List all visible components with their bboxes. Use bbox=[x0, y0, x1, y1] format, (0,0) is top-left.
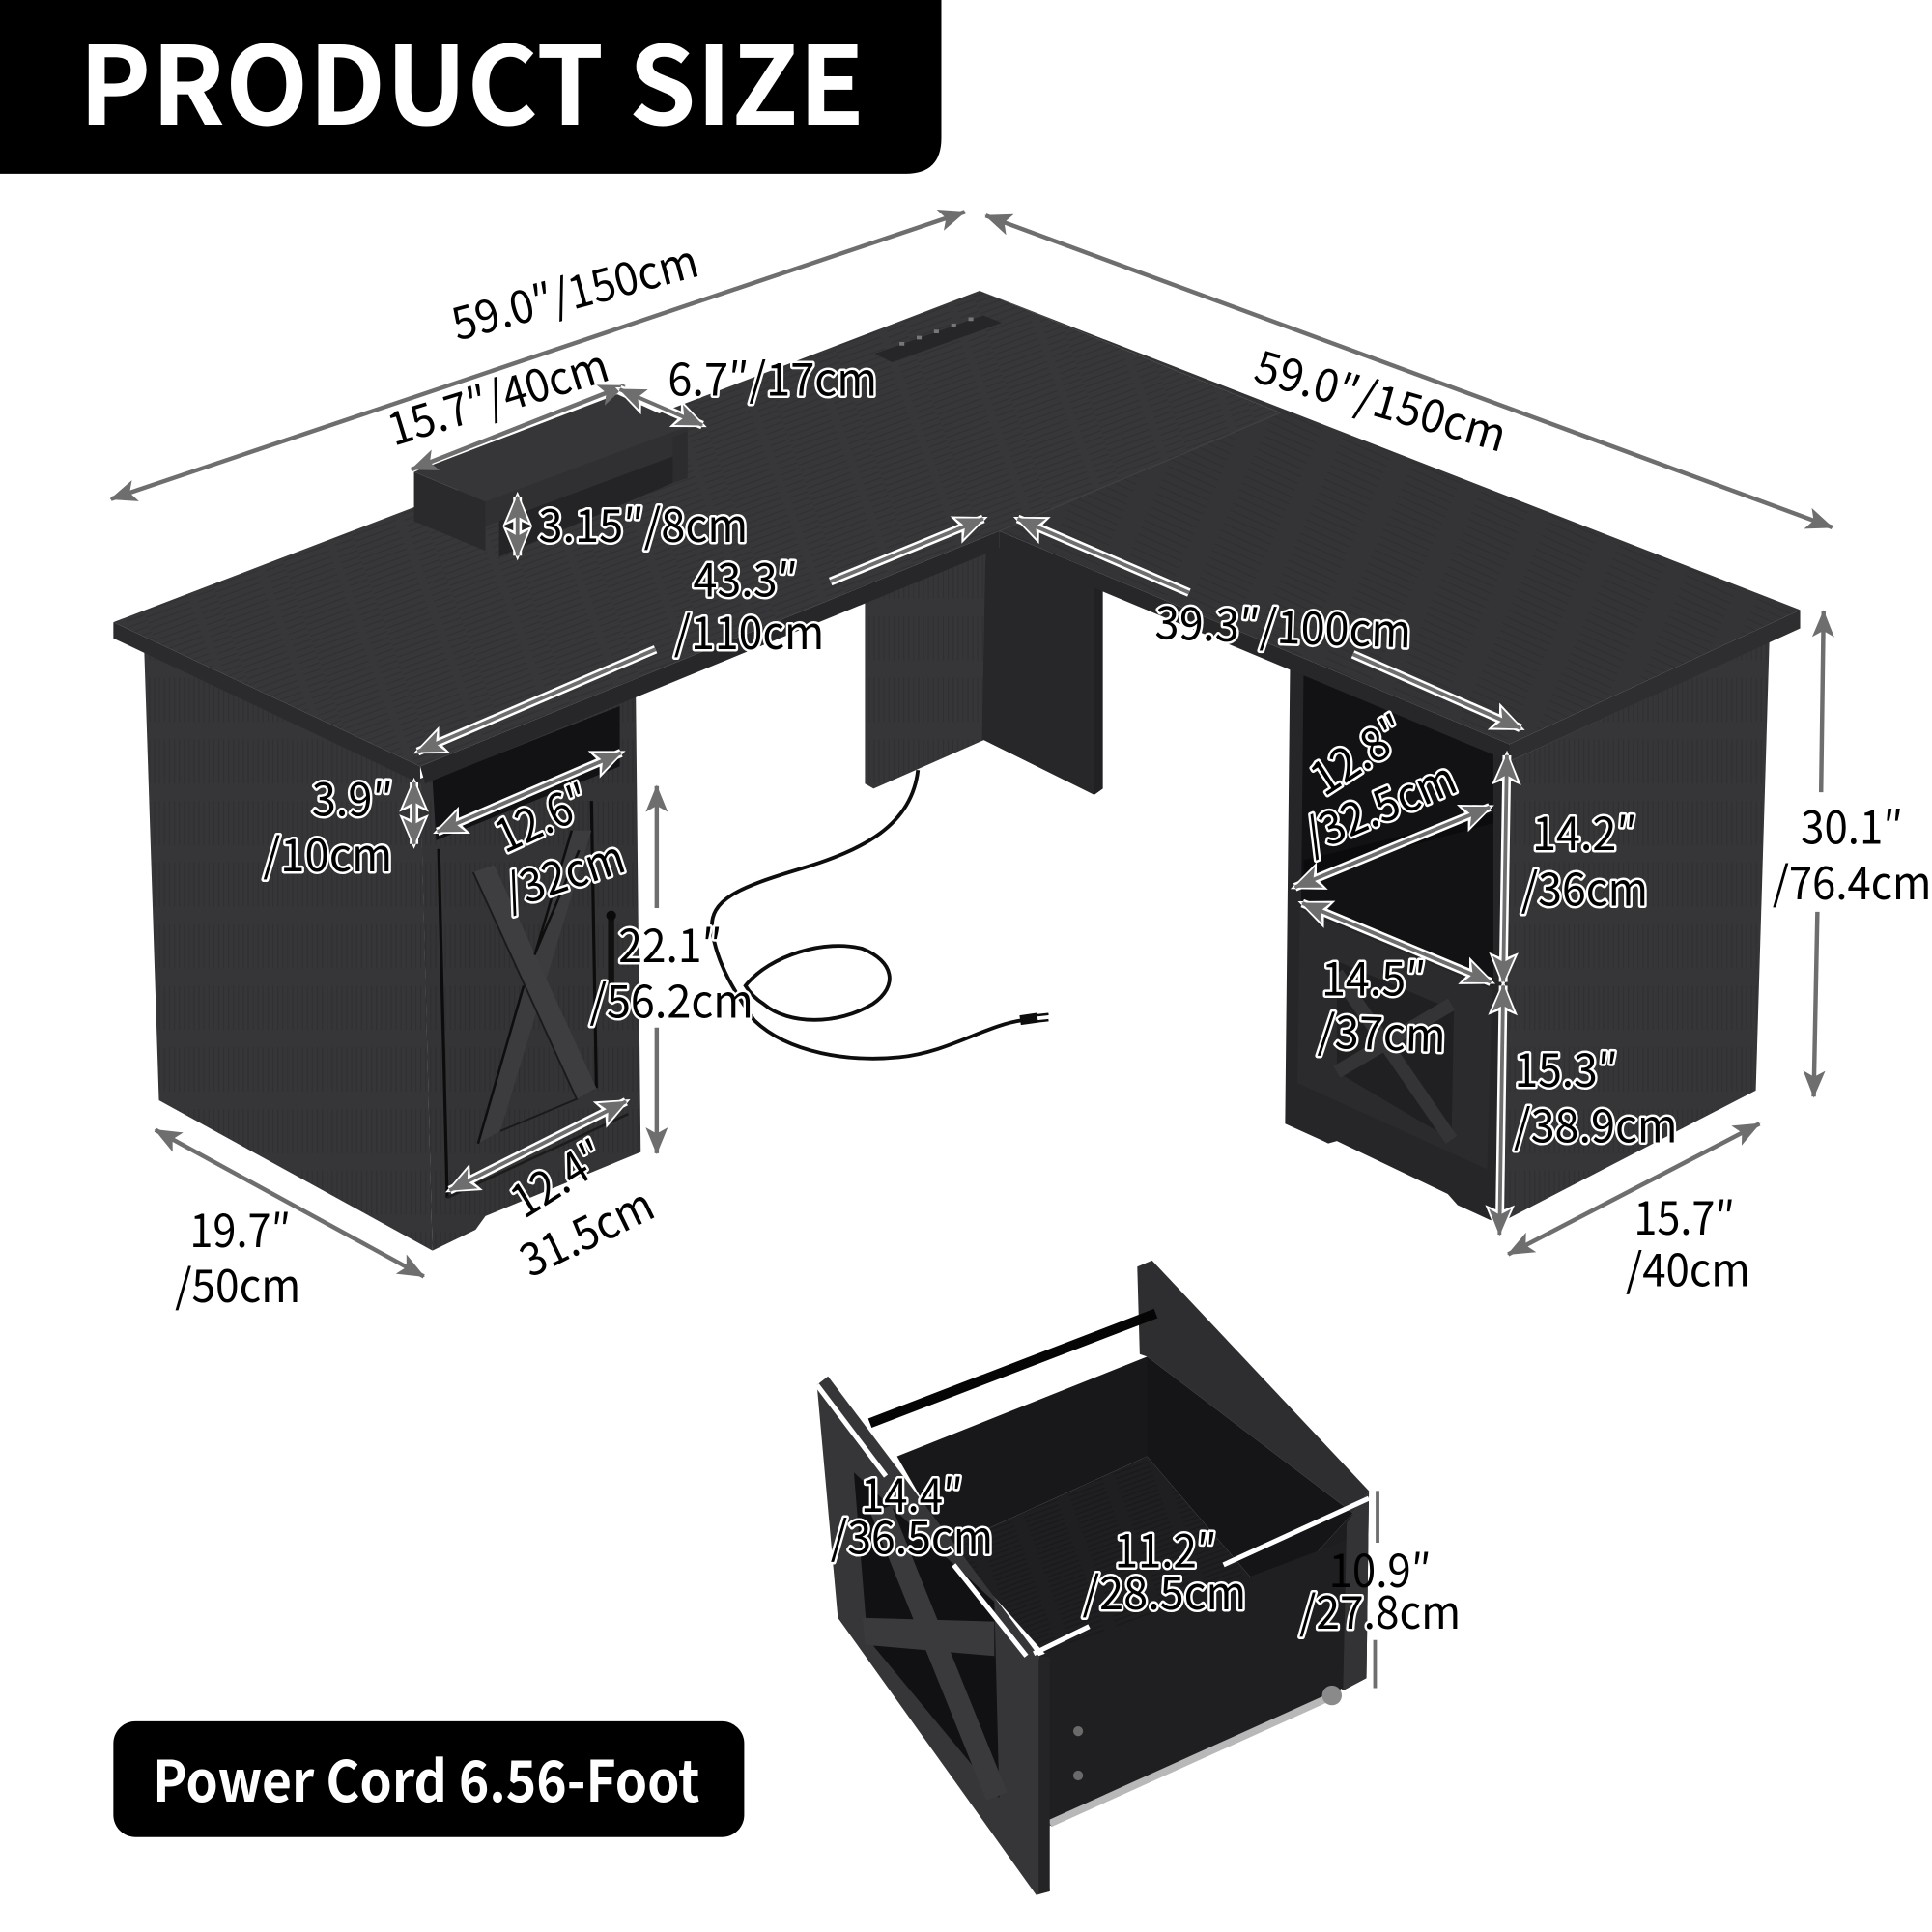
label: door width: 12.4″ bbox=[496, 1121, 617, 1231]
dimensions: overall bbox=[111, 212, 1833, 527]
dimensions: left cabinet bbox=[156, 753, 753, 1316]
lower door bbox=[1297, 909, 1492, 1169]
line: drawer depth bbox=[817, 1385, 1026, 1656]
plug bbox=[1020, 1018, 1037, 1020]
file drawer bbox=[817, 1261, 1369, 1895]
label: cubby width: /32cm bbox=[495, 820, 632, 922]
label: shelf width: /32.5cm bbox=[1292, 742, 1465, 866]
arrow: back right width bbox=[985, 215, 1833, 527]
label: riser depth: 6.7″/17cm bbox=[668, 342, 877, 409]
label: cubby height: 3.9″ bbox=[312, 762, 393, 829]
label: right depth bbox=[1626, 1181, 1750, 1300]
label: left depth: /50cm bbox=[175, 1249, 300, 1316]
label: drawer depth: 14.4″ bbox=[861, 1459, 963, 1525]
dimensions: monitor riser bbox=[378, 328, 877, 555]
label: left inner length: /110cm bbox=[674, 596, 824, 663]
label: riser length: 15.7″/40cm bbox=[378, 328, 615, 459]
arrow: lower door height bbox=[1499, 985, 1503, 1235]
arrow: cubby height bbox=[411, 782, 417, 844]
right drawer wall bbox=[1038, 1491, 1369, 1826]
label: upper shelf height bbox=[1521, 797, 1648, 920]
label: drawer width: 11.2″ bbox=[1115, 1514, 1217, 1580]
callout: power cord length bbox=[113, 1721, 744, 1837]
callout text: Power Cord 6.56-Foot bbox=[153, 1736, 699, 1818]
label: door width bbox=[496, 1121, 664, 1291]
label: shelf width: 12.8″ bbox=[1295, 696, 1418, 809]
drawer interior bbox=[897, 1356, 1369, 1690]
left cabinet front bbox=[420, 693, 640, 1251]
hanging rail bbox=[870, 1314, 1155, 1423]
arrow: left inner length bbox=[417, 519, 983, 752]
label: overall height bbox=[1773, 791, 1931, 913]
arrow: overall height bbox=[1814, 611, 1824, 1096]
label: drawer height bbox=[1299, 1534, 1461, 1642]
desktop thickness bbox=[113, 531, 1801, 783]
label: left inner length: 43.3″ bbox=[693, 543, 798, 610]
label: drawer height: /27.8cm bbox=[1299, 1576, 1461, 1642]
arrow: cubby width bbox=[438, 753, 621, 832]
title banner bbox=[0, 0, 941, 174]
dimensions: right cabinet bbox=[1292, 611, 1931, 1300]
label: drawer width: /28.5cm bbox=[1083, 1556, 1246, 1623]
label: drawer width bbox=[1083, 1514, 1246, 1623]
arrow: riser depth bbox=[620, 389, 702, 425]
label: door width: 31.5cm bbox=[507, 1168, 664, 1291]
slide roller bbox=[1322, 1686, 1342, 1705]
open cubby bbox=[433, 706, 620, 840]
label: right depth: 15.7″ bbox=[1634, 1181, 1735, 1248]
label: cubby height: /10cm bbox=[263, 818, 392, 885]
label: cubby width: 12.6″ bbox=[482, 764, 600, 866]
label: overall height: 30.1″ bbox=[1801, 791, 1903, 858]
label: door height: /56.2cm bbox=[589, 965, 753, 1032]
arrow: right inner length bbox=[1018, 519, 1520, 728]
label: right depth: /40cm bbox=[1626, 1234, 1750, 1300]
door handle bbox=[607, 911, 616, 983]
arrow: door height bbox=[655, 786, 659, 1153]
dimensions: drawer bbox=[817, 1385, 1461, 1688]
arrow: riser height bbox=[514, 497, 521, 555]
screws bbox=[1073, 1726, 1083, 1780]
label: lower door height: 15.3″ bbox=[1515, 1034, 1618, 1100]
label: drawer height: 10.9″ bbox=[1329, 1534, 1432, 1601]
label: riser height: 3.15″/8cm bbox=[538, 489, 748, 555]
line: drawer width bbox=[1034, 1498, 1369, 1654]
label: shelf depth: 14.5″ bbox=[1321, 943, 1426, 1009]
arrow: door width bbox=[450, 1101, 626, 1190]
label: cubby height bbox=[263, 762, 393, 885]
line: drawer height bbox=[1375, 1491, 1378, 1688]
L-shaped desk bbox=[113, 291, 1801, 1251]
title: PRODUCT SIZE bbox=[79, 0, 865, 156]
label: back left width: 59.0″/150cm bbox=[443, 224, 704, 354]
barn drawer front bbox=[817, 1377, 1050, 1895]
label: drawer depth bbox=[831, 1459, 993, 1567]
label: left depth: 19.7″ bbox=[189, 1194, 291, 1261]
label: back right width: 59.0″/150cm bbox=[1248, 329, 1516, 465]
label: left depth bbox=[175, 1194, 300, 1316]
desktop surface bbox=[113, 291, 1801, 766]
arrow: shelf depth bbox=[1302, 903, 1491, 982]
barn door bbox=[439, 773, 631, 1198]
monitor riser bbox=[414, 394, 688, 557]
label: lower door height: /38.9cm bbox=[1514, 1089, 1678, 1155]
label: upper shelf height: 14.2″ bbox=[1532, 797, 1637, 864]
arrow: right depth bbox=[1508, 1123, 1759, 1254]
arrow: riser length bbox=[412, 385, 625, 469]
label: lower door height bbox=[1514, 1034, 1678, 1155]
label: upper shelf height: /36cm bbox=[1521, 853, 1648, 920]
power cord bbox=[712, 770, 1048, 1059]
back panel bbox=[1137, 1261, 1369, 1513]
right cabinet front bbox=[1285, 666, 1509, 1222]
right cabinet side bbox=[1499, 642, 1770, 1222]
arrow: back left width bbox=[111, 212, 965, 499]
arrow: shelf width bbox=[1295, 807, 1490, 887]
label: shelf depth bbox=[1317, 943, 1447, 1065]
open shelves bbox=[1301, 671, 1493, 985]
label: cubby width bbox=[482, 764, 632, 922]
power strip bbox=[875, 316, 1002, 362]
drawer slide bbox=[1050, 1698, 1328, 1824]
label: right inner length: 39.3″/100cm bbox=[1154, 585, 1412, 661]
X braces bbox=[473, 831, 596, 1144]
dimensions: inner edges bbox=[417, 519, 1520, 752]
label: left inner length bbox=[674, 543, 824, 663]
label: door height bbox=[589, 909, 753, 1032]
center support panels bbox=[865, 542, 1103, 795]
label: door height: 22.1″ bbox=[618, 909, 722, 976]
left cabinet side bbox=[144, 648, 433, 1251]
label: drawer depth: /36.5cm bbox=[831, 1500, 993, 1567]
arrow: upper shelf height bbox=[1503, 755, 1507, 982]
arrow: left depth bbox=[156, 1130, 424, 1276]
label: shelf depth: /37cm bbox=[1317, 994, 1447, 1065]
